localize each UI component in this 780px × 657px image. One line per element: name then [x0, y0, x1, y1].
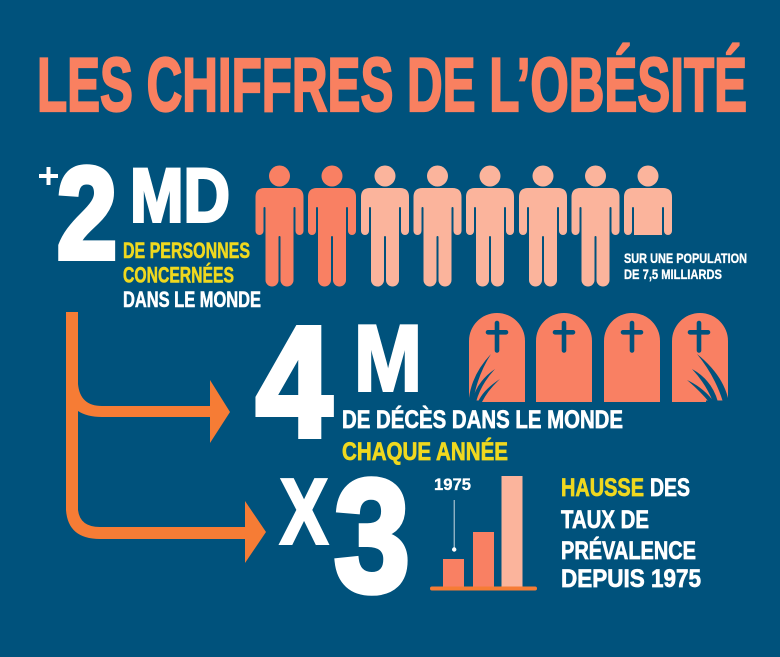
gravestone with left grass [469, 313, 525, 402]
caption: deaths worldwide: CHAQUE ANNÉE [342, 437, 508, 466]
pictogram: gravestones [469, 313, 728, 402]
text: rising prevalence: TAUX DE [561, 506, 649, 534]
plus sign [39, 167, 58, 185]
gravestone [536, 313, 592, 402]
bar chart: prevalence since 1975 [430, 475, 537, 590]
text: rising prevalence: DEPUIS 1975 [561, 565, 701, 593]
note: world population: DE 7,5 MILLIARDS [624, 267, 722, 282]
pictogram: people row [256, 166, 672, 286]
caption: people affected: DANS LE MONDE [123, 287, 261, 312]
stat: times three [280, 446, 410, 625]
leader line [452, 500, 456, 552]
big number 4: 4 [256, 295, 332, 470]
caption: people affected: CONCERNÉES [123, 262, 234, 288]
note: world population [624, 251, 747, 282]
text: rising prevalence: HAUSSE [561, 474, 644, 502]
multiplier X: X [280, 460, 328, 564]
arrows: branching connector [66, 312, 266, 563]
big number 2: 2 [57, 140, 117, 286]
bars [443, 476, 522, 588]
stat: more than 2 billion people [39, 140, 261, 312]
text: rising prevalence: DES [650, 474, 690, 502]
caption: people affected: DE PERSONNES [123, 238, 250, 263]
stat: 4 million deaths [256, 295, 623, 470]
caption: deaths worldwide: DE DÉCÈS DANS LE MONDE [342, 405, 623, 434]
gravestone [604, 313, 660, 402]
caption: deaths worldwide [342, 405, 623, 466]
unit M: M [354, 306, 422, 410]
baseline [430, 586, 537, 590]
note: world population: SUR UNE POPULATION [624, 251, 747, 266]
caption: people affected [123, 238, 261, 312]
text: rising prevalence [561, 474, 701, 593]
unit MD: MD [130, 154, 230, 238]
gravestone with right grass [672, 313, 728, 402]
bar label 1975: 1975 [434, 475, 471, 494]
big number 3: 3 [334, 446, 410, 625]
text: rising prevalence: PRÉVALENCE [561, 536, 696, 565]
